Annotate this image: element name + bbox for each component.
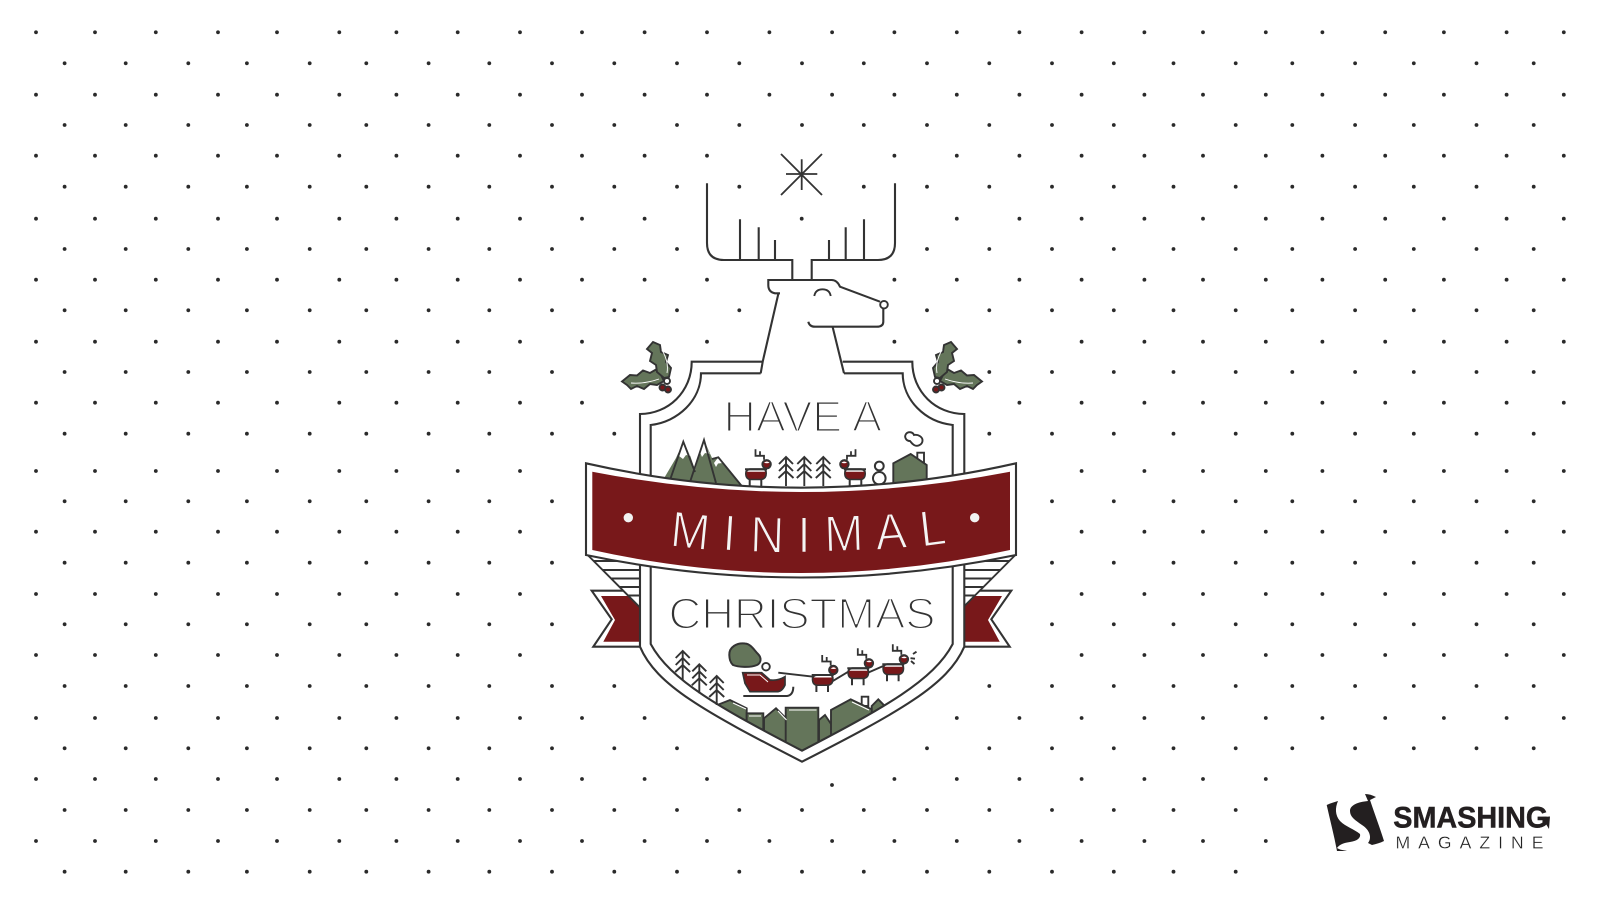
logo: Smashing Magazine — [1327, 794, 1550, 852]
chimney smoke — [905, 432, 923, 446]
mountains — [663, 440, 742, 486]
icon: star — [781, 154, 822, 195]
icon: left holly — [622, 342, 671, 392]
heading: MINIMAL: MINIMAL — [668, 499, 949, 564]
Santa's head — [762, 663, 770, 670]
flying reindeer — [812, 644, 908, 692]
pine trees — [778, 457, 831, 486]
icon: right holly — [933, 342, 982, 392]
Santa's sack — [729, 643, 761, 667]
left reindeer — [745, 449, 771, 486]
sleigh — [743, 673, 793, 696]
heading: CHRISTMAS: CHRISTMAS — [668, 589, 936, 638]
icon: reindeer antlers — [707, 183, 895, 280]
logo wordmark: SMASHING — [1393, 801, 1548, 834]
illustration: village skyline — [718, 696, 884, 750]
shield inner outline — [651, 373, 953, 751]
house with chimney — [893, 453, 927, 484]
illustration: ribbon tails — [587, 550, 1016, 647]
sleigh reins — [778, 666, 883, 682]
icon: reindeer head and neck — [761, 280, 888, 373]
logo subtitle: MAGAZINE — [1396, 832, 1544, 852]
pine trees — [675, 651, 724, 705]
panel: shield badge — [640, 362, 964, 762]
right reindeer — [840, 449, 866, 486]
ribbon left dot — [624, 513, 633, 522]
ribbon right dot — [970, 513, 979, 522]
snowman — [873, 462, 886, 485]
right ribbon tail — [963, 550, 1016, 647]
logo mark: stylised S — [1327, 794, 1384, 851]
heading: HAVE A: HAVE A — [724, 393, 883, 442]
logo arrow — [1542, 816, 1550, 829]
illustration: Santa sleigh scene — [675, 643, 916, 705]
left ribbon tail — [587, 550, 640, 647]
nose glow — [910, 652, 916, 664]
illustration: winter scene above ribbon — [663, 432, 927, 486]
panel: red ribbon banner — [586, 463, 1016, 578]
